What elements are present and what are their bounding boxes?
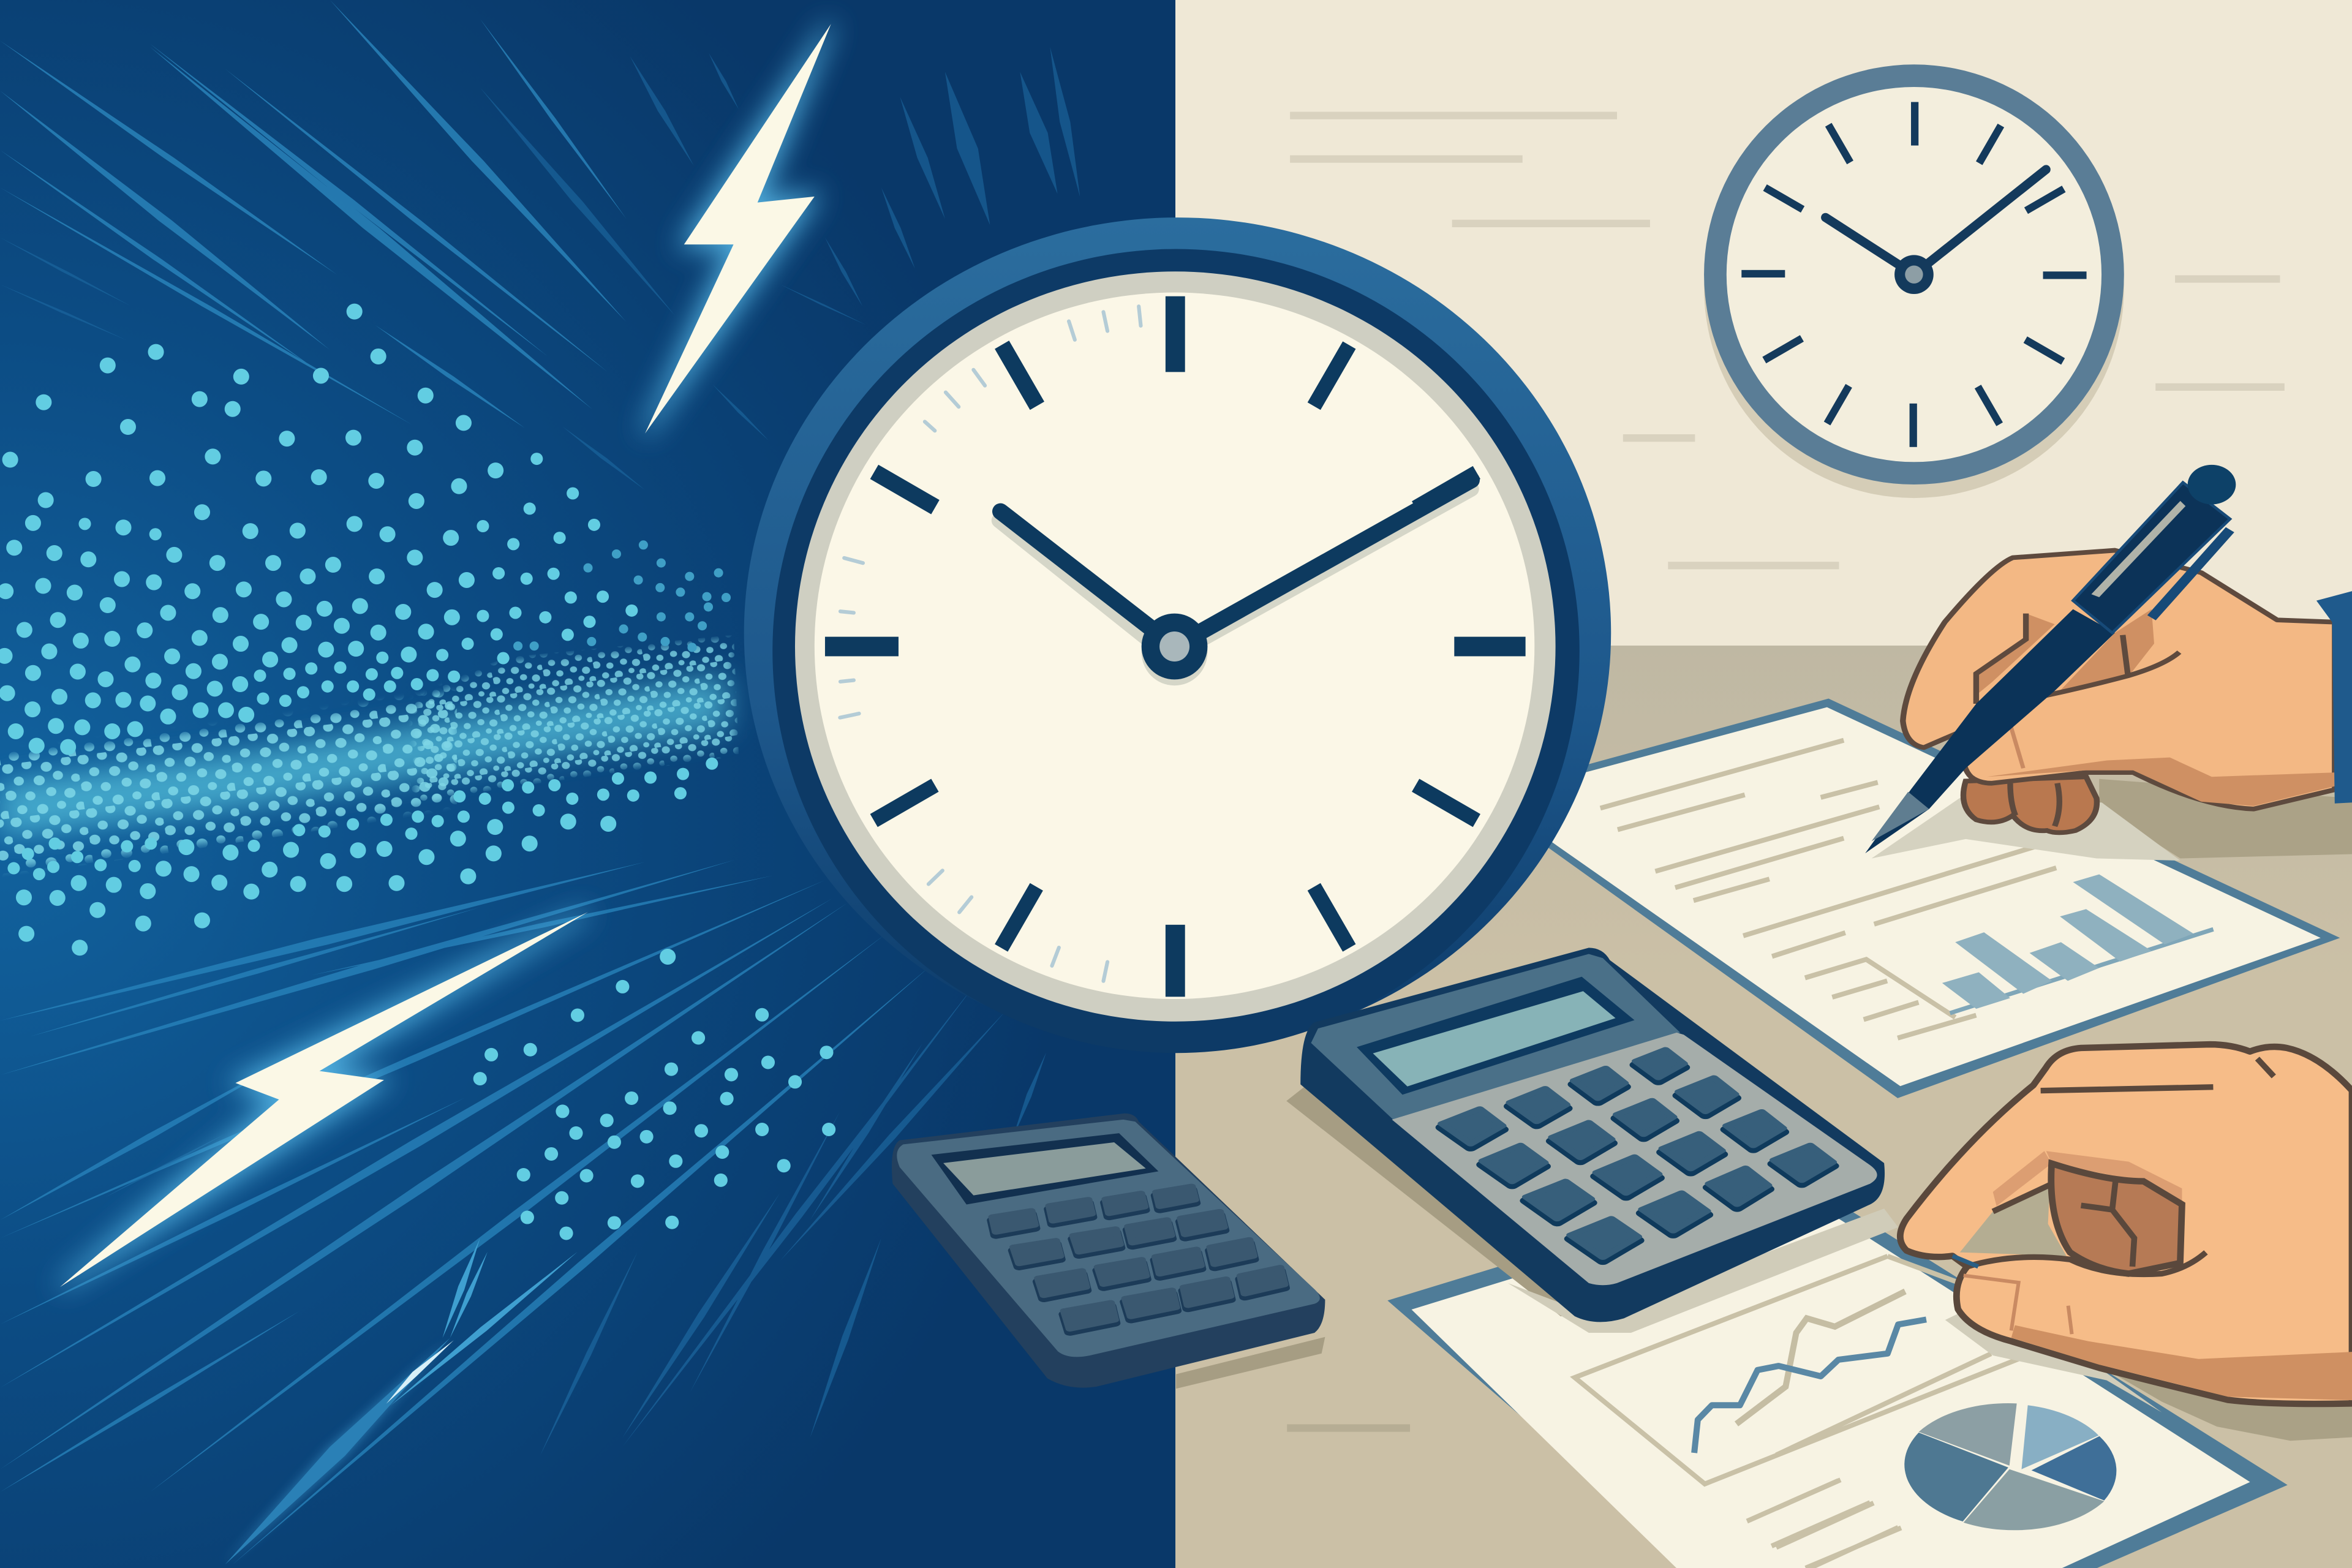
lower particle cluster xyxy=(480,957,829,1233)
panel: desk surface xyxy=(1175,646,2352,1568)
main wall clock xyxy=(744,217,1611,1053)
wall dashes xyxy=(1287,116,2285,1428)
hand body xyxy=(1900,1044,2352,1404)
particle stream dots xyxy=(0,312,739,957)
minute ticks xyxy=(840,306,1141,981)
small wall clock xyxy=(1704,64,2124,498)
small calculator xyxy=(892,1114,1325,1389)
lower speed rays xyxy=(0,860,1046,1564)
large calculator xyxy=(1286,948,1898,1333)
pen xyxy=(1865,465,2236,853)
upper speed rays xyxy=(0,0,1080,490)
document: upper report with bar chart xyxy=(1476,699,2340,1098)
icon: lower lightning bolt xyxy=(60,912,588,1287)
hand shadow xyxy=(1945,1313,2352,1441)
hand shadow xyxy=(1871,779,2352,861)
clock hands xyxy=(999,480,1471,657)
bar chart xyxy=(1942,874,2214,1013)
particle stream glow xyxy=(0,675,726,837)
icon: small blue streak bolt xyxy=(225,1338,454,1564)
hand body xyxy=(1903,551,2335,809)
icon: upper lightning bolt xyxy=(645,24,831,434)
curled fingers xyxy=(1963,777,2097,832)
hour ticks xyxy=(825,296,1526,997)
panel: beige wall xyxy=(1175,0,2352,646)
pie chart xyxy=(1776,1354,2116,1568)
line chart xyxy=(1575,1256,2053,1568)
sleeve xyxy=(2316,591,2352,804)
reaching hand xyxy=(1900,1044,2352,1441)
writing hand xyxy=(1865,465,2352,861)
panel: dark blue speed background xyxy=(0,0,1176,1568)
document: lower report with line chart and pie xyxy=(1387,1176,2288,1568)
